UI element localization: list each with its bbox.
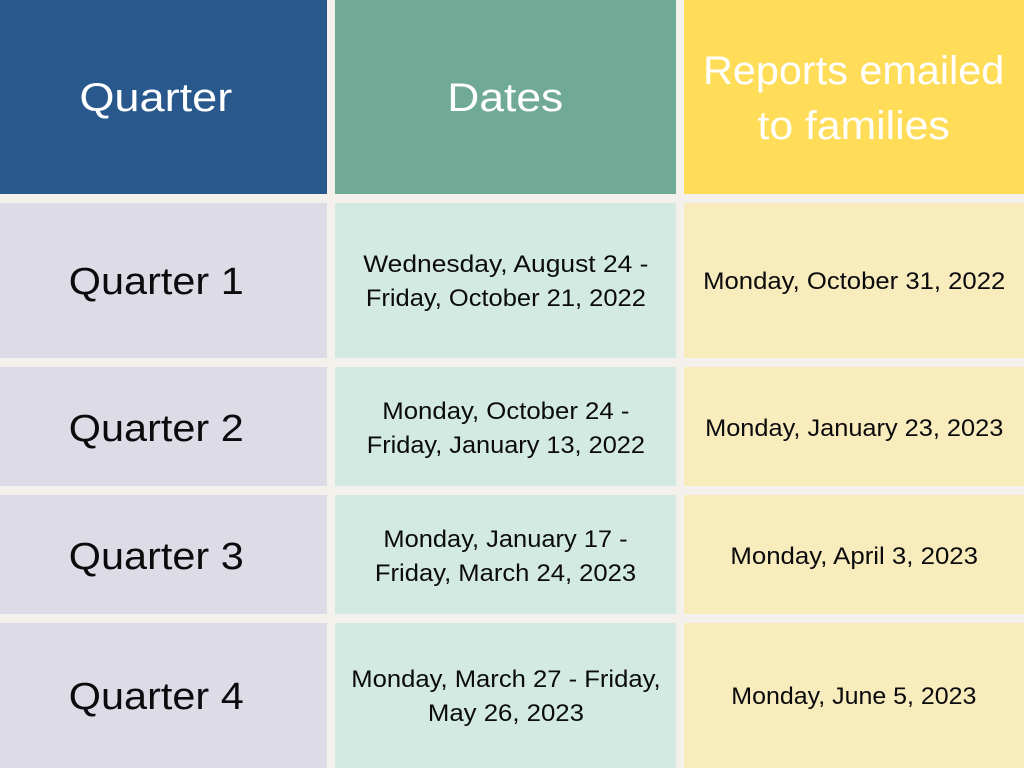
header: Quarter: Quarter — [80, 76, 232, 120]
row 3: dates: Monday, January 17 - — [383, 526, 628, 552]
row 3: dates — [335, 495, 676, 614]
row 2: dates: Friday, January 13, 2022 — [366, 432, 645, 458]
row 2: Quarter 2 — [0, 367, 327, 486]
row 4: Quarter 4: Quarter 4 — [69, 676, 243, 718]
header: Reports emailed to families: to families — [758, 104, 950, 148]
header: Reports emailed to families: Reports emailed — [703, 49, 1005, 93]
row 4: dates — [335, 623, 676, 768]
header: Dates: Dates — [448, 76, 563, 120]
row 3: dates: Friday, March 24, 2023 — [375, 560, 636, 586]
row 4: dates: May 26, 2023 — [427, 700, 584, 726]
row 2: report date: Monday, January 23, 2023 — [705, 414, 1003, 442]
row 2: Quarter 2: Quarter 2 — [69, 408, 243, 450]
row 2: dates — [335, 367, 676, 486]
row 2: report date — [684, 367, 1024, 486]
header: Reports emailed to families — [684, 0, 1024, 194]
row 4: Quarter 4 — [0, 623, 327, 768]
header: Dates — [335, 0, 676, 194]
row 3: report date — [684, 495, 1024, 614]
row 3: Quarter 3 — [0, 495, 327, 614]
row 1: report date: Monday, October 31, 2022 — [703, 268, 1005, 294]
row 4: report date — [684, 623, 1024, 768]
row 1: Quarter 1 — [0, 203, 327, 358]
row 1: Quarter 1: Quarter 1 — [69, 261, 243, 303]
row 3: report date: Monday, April 3, 2023 — [730, 542, 978, 570]
row 4: dates: Monday, March 27 - Friday, — [351, 666, 660, 692]
header: Quarter — [0, 0, 327, 194]
row 1: dates: Friday, October 21, 2022 — [365, 284, 646, 312]
row 4: report date: Monday, June 5, 2023 — [731, 682, 977, 710]
row 2: dates: Monday, October 24 - — [382, 398, 629, 424]
row 1: report date — [684, 203, 1024, 358]
row 1: dates — [335, 203, 676, 358]
row 3: Quarter 3: Quarter 3 — [69, 536, 243, 578]
row 1: dates: Wednesday, August 24 - — [363, 250, 648, 278]
